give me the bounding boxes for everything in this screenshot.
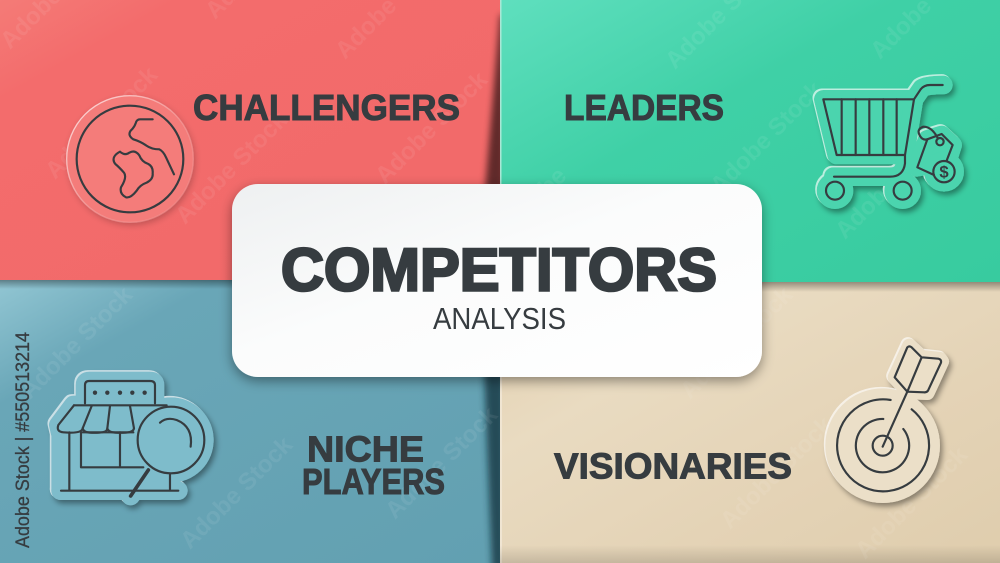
icon: globe [67,96,193,222]
panel: challengers [0,0,500,280]
side credit: Adobe Stock | #550513214 [13,332,34,548]
panel: leaders [500,0,1000,282]
panel: niche players [0,280,500,563]
subtitle: ANALYSIS [433,301,566,336]
watermarks: Adobe Stock [380,401,503,524]
watermarks: Adobe [500,162,572,234]
heading: visionaries: VISIONARIES [554,446,792,486]
dollar sign: $ [939,163,949,182]
cart lines [823,85,943,200]
watermarks: Adobe Stock [40,61,163,184]
title: COMPETITORS [281,236,717,304]
watermarks: Adobe Stock [675,281,798,404]
globe outline and continents [77,106,183,212]
icon: dart target [833,346,942,496]
watermarks: Adobe Stock [705,76,828,199]
magnifier [131,407,204,496]
sticker backing [58,381,204,496]
sticker backing [833,346,942,496]
panel: visionaries [500,282,1000,563]
heading: leaders: LEADERS [564,87,724,128]
dart [883,346,941,447]
card background [232,184,762,377]
watermarks: Adobe Stock [545,241,668,364]
watermarks: Adobe Stock [715,411,838,534]
heading: challengers: CHALLENGERS [193,87,460,128]
icon: store with magnifier [58,381,204,496]
icon: shopping cart with price tag [823,85,955,200]
price tag [917,127,955,182]
watermarks: Adobe Stock [170,106,293,229]
watermarks: Adobe Stock [830,121,953,244]
heading: players: PLAYERS [302,461,445,502]
sticker backing [823,85,955,200]
glass disc [67,96,193,222]
heading: niche: NICHE [307,428,424,470]
watermarks: Adobe Stock [850,441,973,563]
watermarks: Adobe Stock [15,281,138,404]
sign dots [93,390,147,395]
store lines [58,381,178,491]
watermarks: Adobe Stock [175,431,298,554]
watermarks: Adobe Stock [370,66,493,189]
center card [232,184,762,377]
target rings [837,399,929,491]
